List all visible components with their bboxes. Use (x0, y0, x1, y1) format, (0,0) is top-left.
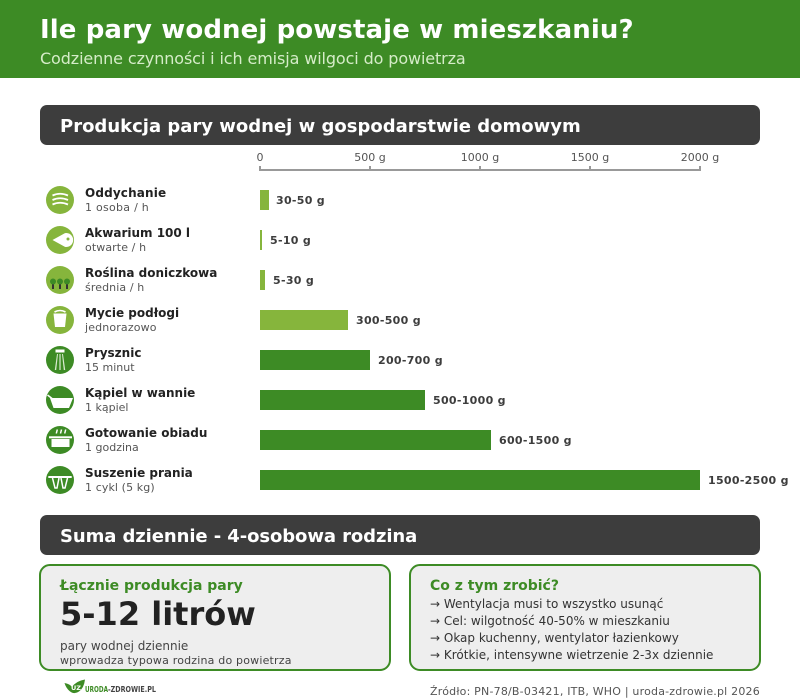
row: Suszenie: 1500-2500 g (708, 474, 789, 487)
row: Mycie podłogi: jednorazowo (85, 321, 157, 334)
row: Kąpiel: Kąpiel w wannie (85, 386, 195, 400)
icon: cooking pot (46, 426, 74, 454)
icon: bathtub (46, 386, 74, 414)
chart axis: 1500 g (571, 151, 609, 164)
section heading: production: Produkcja pary wodnej w gospodarstwie domowym (60, 116, 581, 137)
panel: total production: Łącznie produkcja pary (60, 578, 243, 594)
panel: what to do: Co z tym zrobić? (430, 578, 559, 594)
row: Prysznic: Prysznic (85, 346, 141, 360)
row: Akwarium (46, 226, 311, 254)
logo: -ZDROWIE.PL (108, 685, 156, 694)
row: Suszenie: 1 cykl (5 kg) (85, 481, 155, 494)
row: Suszenie: Suszenie prania (85, 466, 193, 480)
panel: total production (39, 564, 391, 671)
row: Prysznic: 15 minut (85, 361, 135, 374)
icon: breathing (46, 186, 74, 214)
row: Roślina: Roślina doniczkowa (85, 266, 217, 280)
row: Kąpiel: 500-1000 g (433, 394, 506, 407)
subtitle: Codzienne czynności i ich emisja wilgoci do powietrza (40, 49, 466, 68)
row: Mycie podłogi: 300-500 g (356, 314, 421, 327)
panel: what to do (409, 564, 761, 671)
header band (0, 0, 800, 78)
logo: UZ (71, 684, 81, 692)
row: Suszenie (46, 466, 789, 494)
source footer: Źródło: PN-78/B-03421, ITB, WHO | uroda-zdrowie.pl 2026 (430, 685, 760, 698)
panel: total production: pary wodnej dziennie (60, 639, 188, 653)
row: Oddychanie (46, 186, 325, 214)
row: Mycie podłogi: Mycie podłogi (85, 306, 179, 320)
row: Gotowanie: 1 godzina (85, 441, 139, 454)
panel: total production: wprowadza typowa rodzina do powietrza (60, 654, 292, 667)
chart axis: 500 g (354, 151, 386, 164)
chart axis: 0 (256, 151, 264, 164)
title: Ile pary wodnej powstaje w mieszkaniu? (40, 15, 634, 45)
row: Gotowanie: Gotowanie obiadu (85, 426, 207, 440)
chart axis: 1000 g (461, 151, 499, 164)
row: Roślina (46, 266, 314, 294)
row: Kąpiel: 1 kąpiel (85, 401, 128, 414)
panel: what to do: → Wentylacja musi to wszystko usunąć (430, 597, 663, 611)
icon: shower (46, 346, 74, 374)
row: Akwarium: 5-10 g (270, 234, 311, 247)
row: Oddychanie: Oddychanie (85, 186, 166, 200)
row: Akwarium: otwarte / h (85, 241, 146, 254)
section heading: daily total (40, 515, 760, 555)
panel: what to do: → Okap kuchenny, wentylator łazienkowy (430, 631, 679, 645)
row: Gotowanie: 600-1500 g (499, 434, 572, 447)
row: Prysznic (46, 346, 443, 374)
row: Oddychanie: 30-50 g (276, 194, 325, 207)
chart axis: 2000 g (681, 151, 719, 164)
icon: bucket (46, 306, 74, 334)
section heading: daily total: Suma dziennie - 4-osobowa rodzina (60, 526, 417, 547)
row: Akwarium: Akwarium 100 l (85, 226, 190, 240)
row: Prysznic: 200-700 g (378, 354, 443, 367)
row: Oddychanie: 1 osoba / h (85, 201, 149, 214)
row: Gotowanie (46, 426, 572, 454)
icon: fish (46, 226, 74, 254)
icon: drying rack (46, 466, 74, 494)
icon: plants (46, 266, 74, 294)
row: Roślina: średnia / h (85, 281, 144, 294)
panel: total production: 5-12 litrów (60, 595, 256, 633)
row: Mycie podłogi (46, 306, 421, 334)
panel: what to do: → Krótkie, intensywne wietrzenie 2-3x dziennie (430, 648, 713, 662)
section heading: production (40, 105, 760, 145)
chart axis (256, 151, 719, 171)
panel: what to do: → Cel: wilgotność 40-50% w mieszkaniu (430, 614, 670, 628)
logo (64, 680, 156, 694)
row: Kąpiel (46, 386, 506, 414)
row: Roślina: 5-30 g (273, 274, 314, 287)
logo: URODA (85, 685, 109, 694)
